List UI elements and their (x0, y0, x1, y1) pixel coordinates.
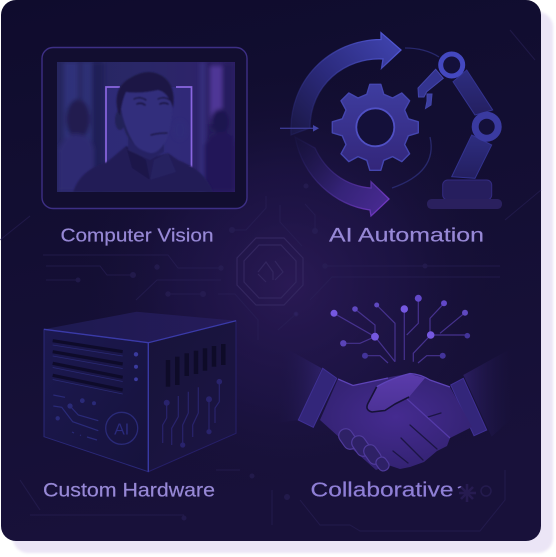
label: collaborative: Collaborative (310, 479, 454, 502)
label: computer vision: Computer Vision (60, 225, 214, 246)
robot arm (418, 54, 502, 209)
label: collaborative (310, 479, 491, 502)
vent highlights (53, 345, 123, 394)
hand top edge highlight (338, 374, 450, 387)
arm lower segment (452, 135, 492, 178)
clasped hands (320, 374, 472, 470)
gripper (418, 69, 443, 108)
person facial features (134, 98, 170, 135)
base (443, 180, 492, 200)
left cuff (298, 368, 337, 427)
side circuit traces (163, 380, 222, 447)
left hand fingers (336, 426, 391, 473)
AI badge: AI (114, 422, 129, 438)
joint bottom (475, 115, 498, 138)
panel: computer vision (42, 48, 247, 208)
person (73, 72, 213, 192)
video still of a person (57, 62, 235, 192)
person hair (116, 72, 174, 116)
thumb (367, 374, 425, 412)
gear icon (332, 84, 418, 170)
server box top face (44, 312, 236, 343)
panel: collaborative (275, 295, 512, 473)
neural tree above handshake (330, 295, 470, 363)
panel: ai automation (280, 33, 502, 216)
input arrow (280, 125, 319, 132)
finger lines (393, 413, 441, 463)
server box front face (44, 329, 148, 472)
camera frame (42, 48, 247, 208)
right cuff (451, 378, 487, 436)
arm upper segment (453, 70, 493, 115)
person shoulders and shirt (73, 146, 213, 192)
index finger edge (407, 399, 450, 438)
server box side face (148, 321, 236, 472)
label: custom hardware: Custom Hardware (43, 480, 215, 502)
panel: custom hardware (44, 312, 236, 472)
face detection brackets (106, 87, 192, 167)
side vents (168, 344, 223, 387)
box highlighted edges (44, 321, 236, 472)
AI badge (106, 412, 138, 444)
person ears and face (115, 110, 125, 130)
circular arrow: bottom (295, 137, 389, 216)
center octagon chip emblem (237, 238, 303, 305)
circular arrow: top (291, 33, 401, 135)
person neck (128, 139, 164, 159)
status lights (134, 352, 138, 381)
clipped letter fragment and star artifact (458, 484, 491, 502)
label: ai automation: AI Automation (329, 225, 484, 247)
joint top (441, 54, 463, 76)
front vents (53, 341, 123, 390)
right sleeve (463, 348, 512, 437)
thin orbit arcs (392, 48, 439, 188)
front circuit traces (53, 395, 98, 440)
left sleeve (275, 345, 322, 423)
